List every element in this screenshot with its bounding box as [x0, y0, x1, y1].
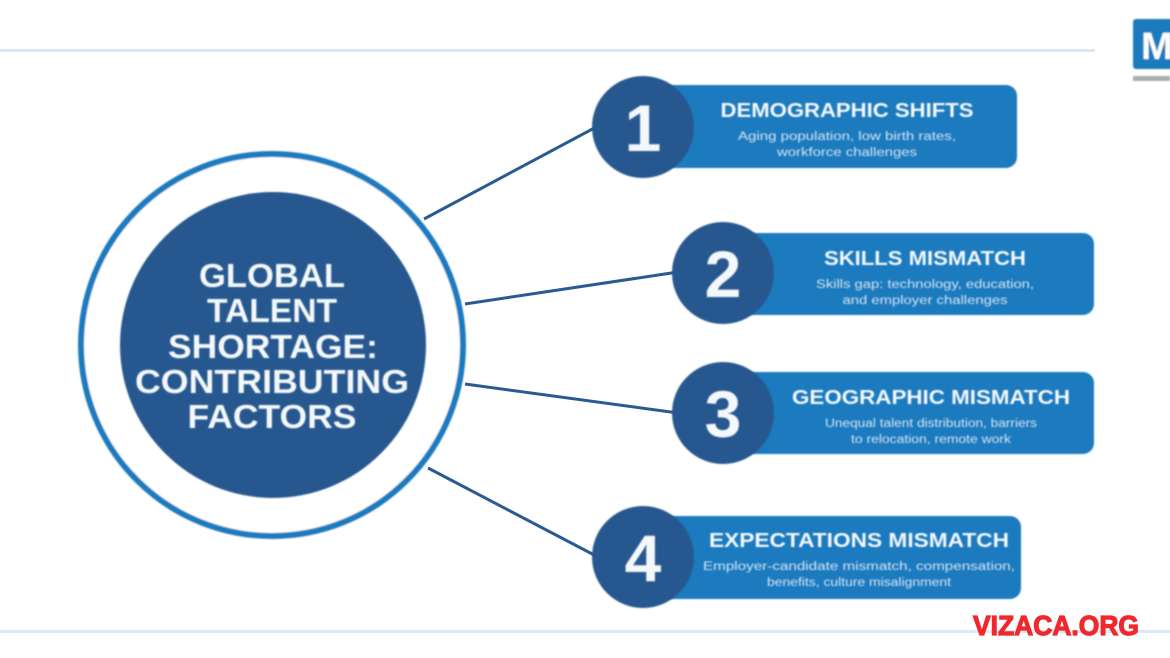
factor 1: demographic shifts: DEMOGRAPHIC SHIFTS [720, 100, 974, 122]
factor 4: expectations mismatch: Employer-candidate mismatch, compensation, [703, 561, 1015, 573]
factor 3: geographic mismatch: GEOGRAPHIC MISMATCH [792, 387, 1070, 409]
factor 4: expectations mismatch: benefits, culture misalignment [767, 577, 952, 589]
factor 2: skills mismatch: Skills gap: technology, education, [816, 279, 1034, 291]
central title: TALENT [207, 292, 337, 329]
factor 2: skills mismatch [672, 222, 1094, 324]
central title [135, 257, 409, 435]
factor 1: demographic shifts: Aging population, low birth rates, [738, 131, 956, 143]
central title: GLOBAL [199, 257, 345, 294]
logo [1133, 19, 1170, 81]
connector lines [424, 126, 678, 557]
factor 1: demographic shifts [592, 76, 1017, 178]
central circle: global talent shortage [81, 154, 463, 536]
central title: SHORTAGE: [168, 328, 378, 365]
factor 1: demographic shifts: 1 [625, 91, 661, 165]
factor 3: geographic mismatch: 3 [705, 377, 741, 451]
central title: FACTORS [188, 398, 356, 435]
central title: CONTRIBUTING [135, 363, 409, 400]
factor 2: skills mismatch: SKILLS MISMATCH [824, 248, 1026, 270]
factor 3: geographic mismatch [672, 362, 1094, 464]
factor 2: skills mismatch: 2 [705, 237, 741, 311]
factor 4: expectations mismatch [592, 506, 1021, 608]
watermark: VIZACA.ORG [973, 610, 1139, 641]
factor 4: expectations mismatch: 4 [625, 521, 662, 595]
factor 1: demographic shifts: workforce challenges [776, 147, 917, 159]
factor 3: geographic mismatch: Unequal talent distribution, barriers [825, 418, 1037, 430]
top divider line [0, 49, 1095, 52]
factor 2: skills mismatch: and employer challenges [842, 295, 1008, 307]
bottom divider line [0, 630, 1170, 633]
factor 3: geographic mismatch: to relocation, remote work [851, 434, 1011, 446]
factor 4: expectations mismatch: EXPECTATIONS MISMATCH [709, 530, 1009, 552]
